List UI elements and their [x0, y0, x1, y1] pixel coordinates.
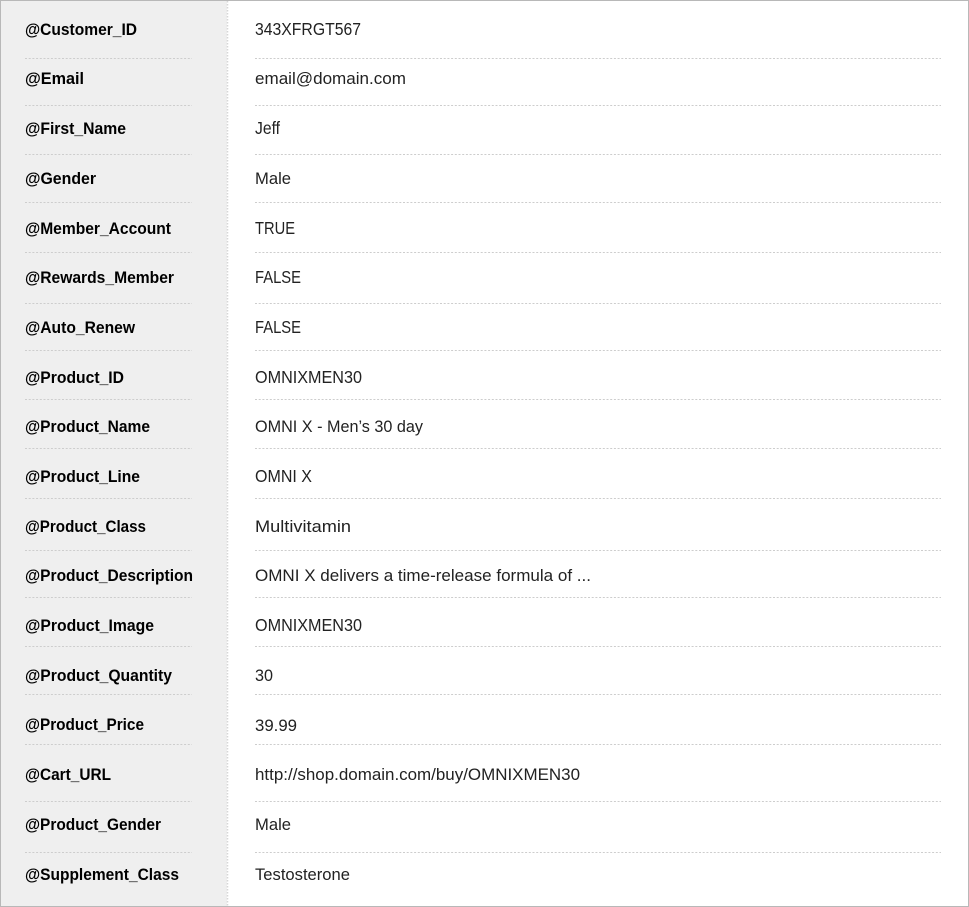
variable values: http://shop.domain.com/buy/OMNIXMEN30 [255, 766, 580, 784]
variable names: @Product_Name [25, 418, 150, 436]
variable values: email@domain.com [255, 70, 406, 88]
variable values: 30 [255, 667, 273, 685]
variable values: Multivitamin [255, 518, 351, 536]
variable names: @Member_Account [25, 220, 171, 238]
variable names: @Product_Quantity [25, 667, 173, 685]
variable names: @First_Name [25, 120, 126, 138]
variable names: @Customer_ID [25, 21, 137, 39]
variable values: FALSE [255, 317, 301, 337]
variable names: @Supplement_Class [25, 866, 179, 884]
variable values [255, 19, 591, 884]
variable names: @Gender [25, 170, 97, 188]
variable names: @Auto_Renew [25, 319, 135, 337]
variable values: OMNIXMEN30 [255, 615, 362, 635]
variable values: Male [255, 816, 291, 834]
variable names: @Product_Gender [25, 816, 162, 834]
variable values: Male [255, 170, 291, 188]
variable names: @Email [25, 70, 84, 88]
variable values: OMNI X [255, 466, 312, 486]
variable values: OMNI X - Men’s 30 day [255, 418, 424, 436]
variable values: OMNI X delivers a time-release formula of ... [255, 567, 591, 585]
variable names: @Product_Class [25, 518, 146, 536]
variable values: FALSE [255, 267, 301, 287]
variable names [25, 21, 193, 884]
variable values: Testosterone [255, 866, 350, 884]
variable values: OMNIXMEN30 [255, 367, 362, 387]
variable names: @Cart_URL [25, 766, 111, 784]
variable values: 39.99 [255, 717, 297, 735]
variable values: Jeff [255, 118, 280, 138]
variable names: @Product_ID [25, 369, 124, 387]
panel: label column [1, 1, 227, 906]
variable values: TRUE [255, 218, 295, 238]
variable values: 343XFRGT567 [255, 19, 361, 39]
variable names: @Product_Price [25, 716, 144, 734]
variable names: @Product_Line [25, 468, 140, 486]
variable names: @Product_Description [25, 567, 193, 585]
variable names: @Rewards_Member [25, 269, 175, 287]
variable names: @Product_Image [25, 617, 154, 635]
